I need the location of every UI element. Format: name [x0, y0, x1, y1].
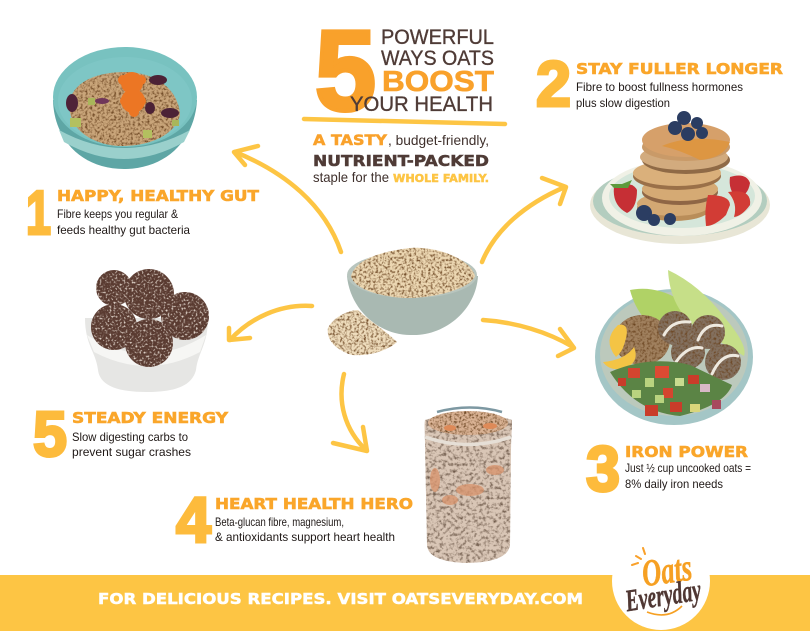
icon: overnight oats jar — [425, 408, 512, 563]
heading line: powerful: POWERFUL — [381, 26, 494, 49]
big numeral 5: 5 — [315, 8, 376, 135]
benefit 3: iron power — [586, 433, 751, 505]
blueberries — [636, 111, 708, 226]
heading line: your health: YOUR HEALTH — [350, 93, 493, 116]
arrow: oats to iron — [483, 320, 574, 356]
description: feeds healthy gut bacteria — [57, 223, 190, 237]
number 4: 4 — [176, 484, 211, 556]
subtitle line 2: NUTRIENT-PACKED — [313, 152, 489, 170]
logo rays — [632, 548, 645, 565]
description: Just ½ cup uncooked oats = — [625, 461, 751, 475]
carrot flowers — [118, 72, 146, 117]
benefit 5: steady energy — [33, 398, 229, 470]
number 1: 1 — [26, 179, 51, 248]
description: Beta-glucan fibre, magnesium, — [215, 515, 344, 529]
title underline — [304, 119, 505, 124]
footer banner — [0, 575, 810, 631]
logo smile — [647, 606, 682, 615]
icon: energy balls in ramekin — [85, 269, 209, 392]
heading line: ways oats: WAYS OATS — [381, 47, 494, 70]
call to action text: FOR DELICIOUS RECIPES. VISIT OATSEVERYDAY.COM — [98, 590, 583, 608]
subtitle line 1 continued: , budget-friendly, — [388, 132, 489, 148]
subtitle line 1: A TASTY — [313, 133, 388, 149]
heading: HEART HEALTH HERO — [215, 495, 413, 513]
icon: meatball and salad bowl — [595, 270, 753, 425]
number 2: 2 — [536, 48, 571, 120]
number 3: 3 — [586, 433, 620, 505]
description: & antioxidants support heart health — [215, 530, 395, 544]
icon: bowl of rolled oats — [328, 248, 478, 355]
meatballs — [658, 311, 741, 380]
subtitle — [313, 132, 489, 185]
description: Fibre to boost fullness hormones — [576, 80, 743, 94]
icon: teal bowl of grains — [53, 47, 197, 169]
description: plus slow digestion — [576, 96, 670, 110]
arrow: oats to heart — [333, 374, 367, 451]
arrow: oats to gut — [234, 146, 341, 252]
icon: pancakes on plate — [590, 111, 770, 244]
logo: oats everyday — [612, 532, 710, 630]
chopped salad — [610, 361, 732, 416]
arrow: oats to fuller — [482, 178, 566, 262]
subtitle highlight: WHOLE FAMILY. — [393, 173, 489, 185]
strawberries — [610, 175, 750, 226]
heading: IRON POWER — [625, 443, 748, 461]
description: 8% daily iron needs — [625, 477, 723, 491]
lettuce — [630, 289, 690, 330]
heading: HAPPY, HEALTHY GUT — [57, 187, 260, 205]
description: Slow digesting carbs to — [72, 430, 188, 444]
benefit 1: happy healthy gut — [26, 179, 260, 248]
subtitle line 3: staple for the — [313, 169, 389, 185]
benefit 2: stay fuller longer — [536, 48, 783, 120]
sauce drizzle — [664, 322, 738, 374]
grain mound — [614, 315, 670, 365]
heading: STAY FULLER LONGER — [576, 60, 783, 78]
logo word oats: Oats — [639, 547, 695, 595]
number 5: 5 — [33, 398, 67, 470]
arrow: oats to energy — [229, 306, 312, 340]
flake pile — [328, 310, 397, 355]
energy balls — [91, 269, 209, 367]
heading: STEADY ENERGY — [72, 409, 229, 427]
description: prevent sugar crashes — [72, 445, 191, 459]
heading line: boost: BOOST — [382, 66, 494, 98]
description: Fibre keeps you regular & — [57, 207, 178, 221]
bowl — [347, 276, 478, 335]
lemon wedges — [609, 325, 627, 357]
pancake stack — [633, 123, 730, 221]
benefit 4: heart health hero — [176, 484, 413, 556]
logo word everyday: Everyday — [622, 572, 703, 618]
title block — [315, 8, 494, 135]
